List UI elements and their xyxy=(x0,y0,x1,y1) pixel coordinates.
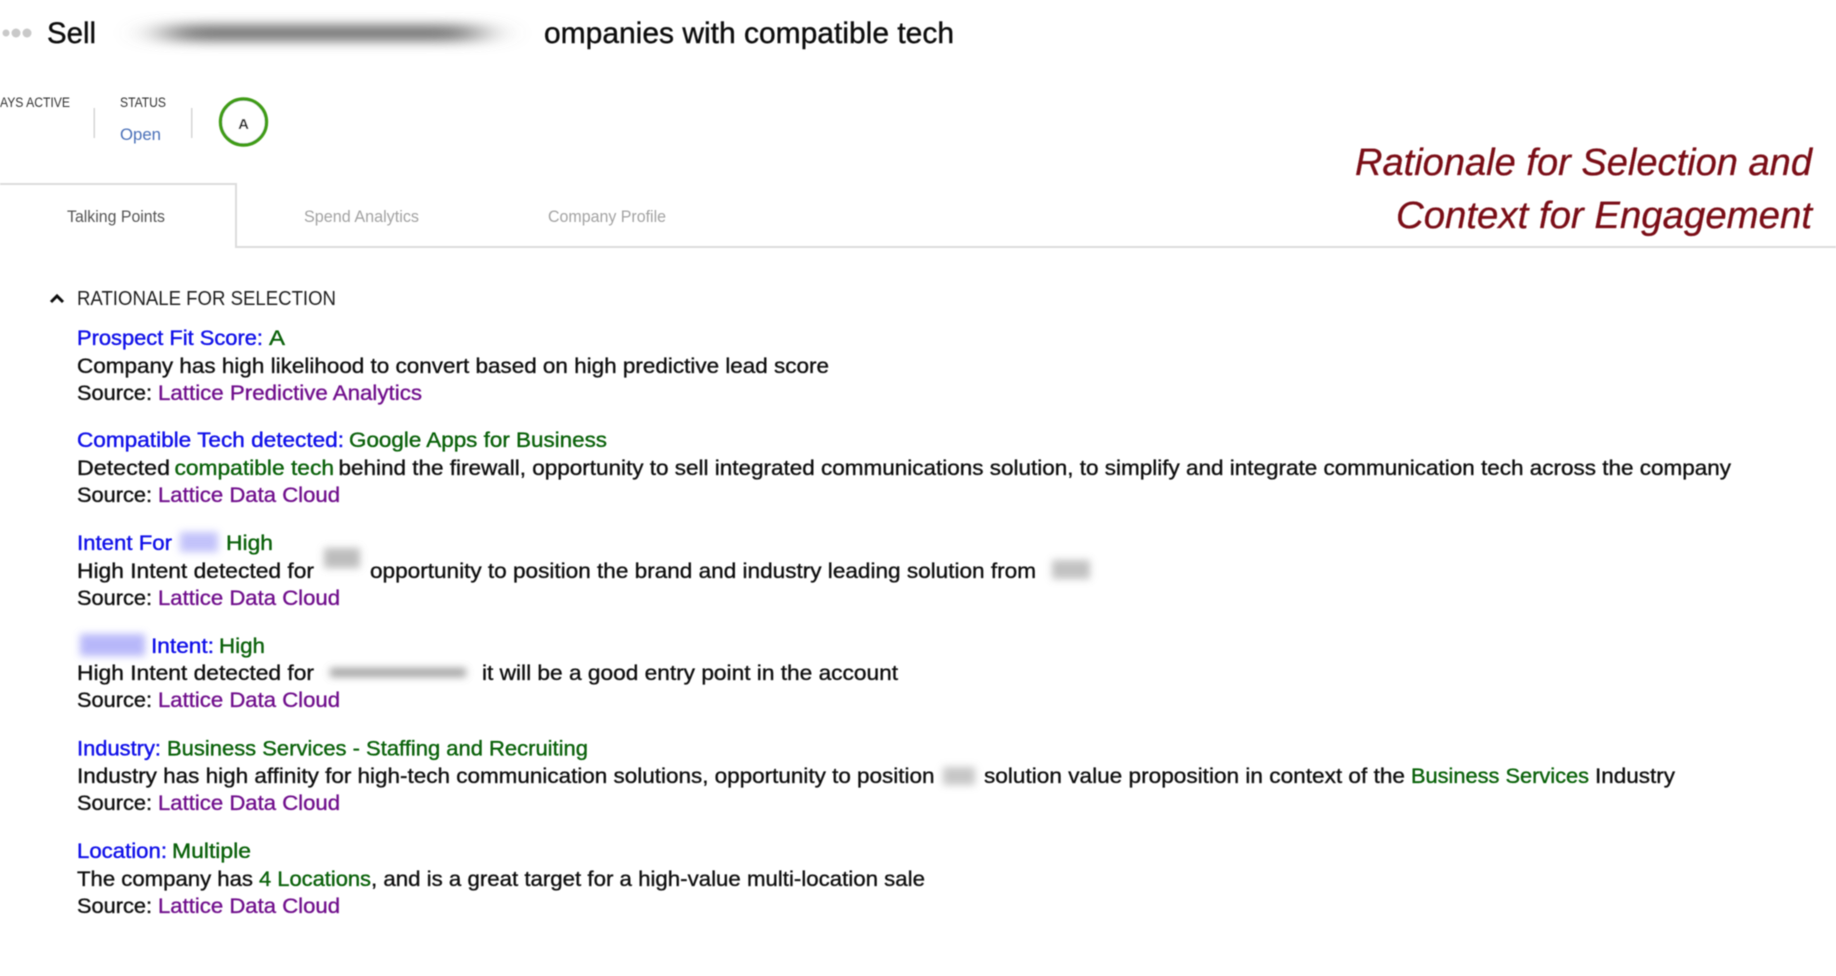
item: location: Lattice Data Cloud xyxy=(158,894,340,918)
tab: spend analytics: Spend Analytics xyxy=(304,208,419,226)
section heading xyxy=(51,288,336,310)
item: prospect fit score: Prospect Fit Score: xyxy=(77,326,263,350)
item: industry: Industry xyxy=(1595,764,1675,788)
days active label: AYS ACTIVE xyxy=(0,95,70,110)
item: compatible tech: behind the firewall, opportunity to sell integrated communications solution, to simplify and integrate communication tech across the company xyxy=(338,456,1731,480)
item: compatible tech: compatible tech xyxy=(174,456,334,480)
item: industry xyxy=(77,736,1675,815)
item: location xyxy=(77,839,925,918)
item: intent high: Lattice Data Cloud xyxy=(158,688,340,712)
title left text: Sell xyxy=(47,17,96,50)
item: prospect fit score: Lattice Predictive Analytics xyxy=(158,381,422,405)
icon: collapse caret xyxy=(51,296,63,302)
tab: talking points: Talking Points xyxy=(67,208,165,226)
heading text: RATIONALE FOR SELECTION xyxy=(77,288,336,310)
item: industry: Business Services xyxy=(1411,764,1589,788)
item: industry: Industry: xyxy=(77,736,161,760)
item: location: The company has xyxy=(77,867,253,891)
item: location: , and is a great target for a high-value multi-location sale xyxy=(371,867,925,891)
item: industry: solution value proposition in context of the xyxy=(984,764,1405,788)
callout: rationale annotation: Rationale for Selection and xyxy=(1355,142,1814,184)
item: intent high: High Intent detected for xyxy=(77,661,314,685)
tab bar xyxy=(0,184,1836,247)
divider right xyxy=(191,108,192,138)
item: prospect fit score xyxy=(77,326,829,405)
title right text: ompanies with compatible tech xyxy=(544,17,954,50)
callout: rationale annotation: Context for Engagement xyxy=(1396,195,1813,237)
item: intent for redacted product: High xyxy=(226,531,273,555)
item: intent for redacted product: High Intent detected for xyxy=(77,559,314,583)
tab: company profile: Company Profile xyxy=(548,208,666,226)
callout: rationale annotation xyxy=(1355,142,1814,237)
item: industry: Industry has high affinity for high-tech communication solutions, opportunity to position xyxy=(77,764,935,788)
status label: STATUS xyxy=(120,95,166,110)
item: location: Source: xyxy=(77,894,152,918)
item: prospect fit score: A xyxy=(269,326,286,350)
item: compatible tech: Source: xyxy=(77,483,152,507)
item: location: Multiple xyxy=(172,839,251,863)
header title bar xyxy=(2,17,954,50)
item: intent high xyxy=(77,634,898,712)
grade badge: A xyxy=(238,116,249,133)
item: intent for redacted product xyxy=(77,531,1090,610)
item: intent for redacted product: Intent For xyxy=(77,531,172,555)
item: intent for redacted product: opportunity to position the brand and industry leading solution from xyxy=(370,559,1036,583)
item: compatible tech xyxy=(77,428,1731,507)
divider left xyxy=(94,108,95,138)
item: location: Location: xyxy=(77,839,167,863)
item: location: 4 Locations xyxy=(259,867,371,891)
item: intent high: High xyxy=(219,634,265,658)
item: prospect fit score: Source: xyxy=(77,381,152,405)
item: industry: Business Services - Staffing and Recruiting xyxy=(167,736,588,760)
item: industry: Lattice Data Cloud xyxy=(158,791,340,815)
item: compatible tech: Lattice Data Cloud xyxy=(158,483,340,507)
icon: menu dots xyxy=(2,28,32,38)
status strip xyxy=(0,95,266,145)
item: intent high: it will be a good entry point in the account xyxy=(482,661,898,685)
status value: Open xyxy=(120,125,161,144)
item: intent high: Source: xyxy=(77,688,152,712)
item: compatible tech: Compatible Tech detected: xyxy=(77,428,344,452)
item: intent for redacted product: Source: xyxy=(77,586,152,610)
item: industry: Source: xyxy=(77,791,152,815)
grade badge xyxy=(220,99,266,145)
redacted title blur xyxy=(165,25,480,41)
panel: rationale items xyxy=(77,326,1731,918)
tab outline xyxy=(0,184,1836,247)
item: intent for redacted product: Lattice Data Cloud xyxy=(158,586,340,610)
item: compatible tech: Detected xyxy=(77,456,170,480)
item: intent high: Intent: xyxy=(151,634,214,658)
item: compatible tech: Google Apps for Business xyxy=(349,428,607,452)
item: prospect fit score: Company has high likelihood to convert based on high predictive lead score xyxy=(77,354,829,378)
